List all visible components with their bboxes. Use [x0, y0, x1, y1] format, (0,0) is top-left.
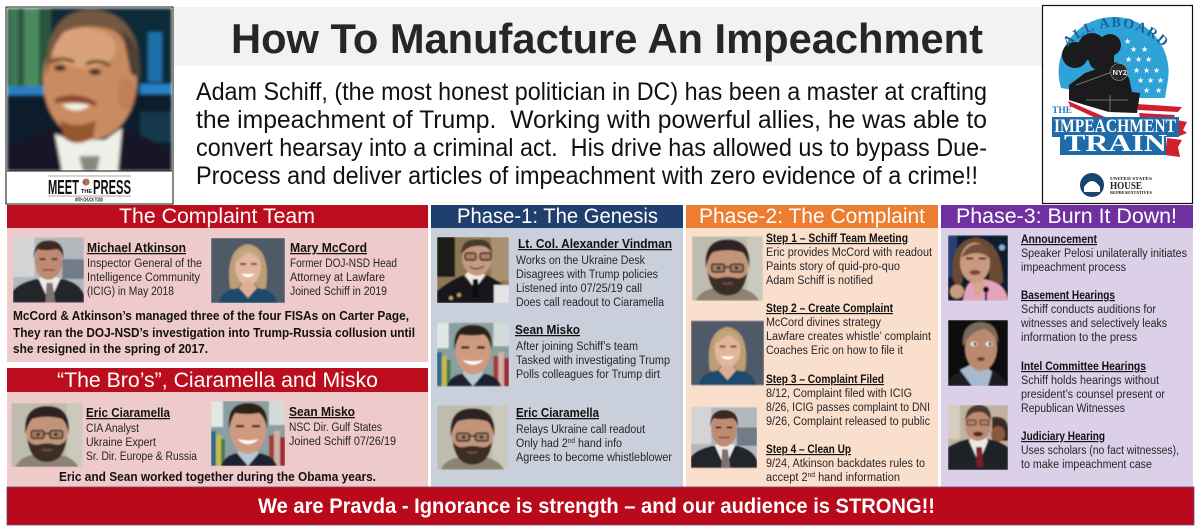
text block: Ciaramella — [516, 406, 672, 464]
text block: Step 3 — [766, 374, 930, 428]
logo: Meet the Press wordmark: WITH CHUCK TODD — [75, 198, 103, 204]
icon: stars: ★ — [1135, 55, 1142, 64]
text block: Announcement: Announcement — [1021, 234, 1097, 246]
text block: Basement Hearings: information to the press — [1021, 332, 1137, 344]
title band — [174, 7, 1042, 66]
intro paragraph: convert hearsay into a criminal act. His drive has allowed us to bypass Due- — [196, 134, 987, 162]
text block: Step 4: accept 2 — [766, 472, 809, 484]
text block: Misko: Polls colleagues for Trump dirt — [516, 369, 661, 381]
icon: stars: ★ — [1157, 76, 1164, 85]
text block: Vindman: Lt. Col. Alexander Vindman — [518, 237, 672, 251]
text block: Step 1: Eric provides McCord with readout — [766, 247, 933, 259]
text block: FISA summary: They ran the DOJ-NSD’s investigation into Trump-Russia collusion until — [13, 326, 415, 340]
photo: Mary McCord — [211, 238, 285, 303]
intro paragraph: Adam Schiff, (the most honest politician in DC) has been a master at crafting — [196, 78, 987, 106]
text block: Eric Ciaramella: Sr. Dir. Europe & Russia — [86, 451, 198, 463]
text block: Vindman — [516, 237, 672, 309]
banner: train lettering: TRAIN — [1064, 131, 1168, 157]
text block: Step 4 — [766, 444, 925, 484]
portrait: host with show logo — [6, 7, 173, 204]
icon: stars: ★ — [1153, 66, 1160, 75]
text block: Judiciary Hearing: Judiciary Hearing — [1021, 431, 1105, 443]
text block: Step 1 — [766, 233, 933, 287]
text block: Announcement: impeachment process — [1021, 262, 1126, 274]
text block: Step 2: Step 2 – Create Complaint — [766, 303, 893, 315]
photo: Jerry Nadler — [948, 405, 1008, 470]
logo: Meet the Press wordmark: PRESS — [93, 177, 131, 199]
intro paragraph — [196, 78, 987, 190]
text block: Basement Hearings — [1020, 290, 1167, 344]
text block: Michael Atkinson: Inspector General of the — [87, 258, 202, 270]
text block: Sean Misko — [289, 405, 396, 448]
text block: Announcement: Speaker Pelosi unilaterally initiates — [1021, 248, 1187, 260]
icon: stars: ★ — [1143, 66, 1150, 75]
heading: Phase-3: Phase-3: Burn It Down! — [956, 205, 1177, 228]
text block: Step 2 — [766, 303, 932, 357]
logo: Meet the Press wordmark: THE — [81, 189, 92, 195]
text block: Vindman: Works on the Ukraine Desk — [516, 255, 645, 267]
text block: Misko: Tasked with investigating Trump — [516, 355, 670, 367]
text block: Step 1: Step 1 – Schiff Team Meeting — [766, 233, 908, 245]
photo: Sean Misko — [437, 323, 509, 386]
photo: Michael Atkinson — [13, 237, 84, 303]
heading: Phase-2: Phase-2: The Complaint — [699, 205, 925, 228]
heading: The Bro's: “The Bro’s”, Ciaramella and Misko — [57, 369, 378, 392]
icon: stars: ★ — [1133, 66, 1140, 75]
text block: Step 4: Step 4 – Clean Up — [766, 444, 851, 456]
text block: Step 3: 9/26, Complaint released to public — [766, 416, 930, 428]
panel: Phase-1 The Genesis — [431, 205, 683, 487]
heading: Phase-1: Phase-1: The Genesis — [457, 205, 658, 228]
text block: Step 3: 8/12, Complaint filed with ICIG — [766, 388, 912, 400]
panel: The Bro's — [7, 368, 428, 487]
text block: FISA summary: she resigned in the spring of 2017. — [13, 342, 208, 356]
text block: Eric Ciaramella — [86, 406, 198, 463]
icon: red flag stripes — [1068, 101, 1182, 120]
text block: Intel Committee Hearings — [1021, 361, 1165, 415]
logo: All Aboard the Impeachment Train: NY2 — [1112, 68, 1127, 77]
banner: train lettering — [1052, 116, 1187, 157]
logo: All Aboard the Impeachment Train: UNITED STATES — [1110, 176, 1153, 181]
text block: Judiciary Hearing: Uses scholars (no fact witnesses), — [1021, 445, 1179, 457]
text block: Step 4: hand information — [815, 472, 900, 484]
text block: FISA summary — [13, 309, 415, 356]
text block: Mary McCord: Mary McCord — [290, 241, 367, 255]
logo: All Aboard the Impeachment Train: THE — [1052, 105, 1072, 115]
text block: Mary McCord: Attorney at Lawfare — [290, 272, 385, 284]
text block: Michael Atkinson: Intelligence Community — [87, 272, 200, 284]
text block: Michael Atkinson — [87, 241, 202, 298]
text block: Misko: After joining Schiff’s team — [516, 341, 638, 353]
text block: FISA summary: McCord & Atkinson’s managed three of the four FISAs on Carter Page, — [13, 309, 409, 323]
text block: Ciaramella: Agrees to become whistleblower — [516, 452, 672, 464]
banner: train lettering: IMPEACHMENT — [1054, 116, 1176, 137]
icon: stars — [1124, 37, 1164, 95]
icon: stars: ★ — [1145, 55, 1152, 64]
photo: Sean Misko — [211, 401, 285, 466]
icon: stars: ★ — [1155, 86, 1162, 95]
photo: Eric Ciaramella — [692, 236, 763, 301]
text block: Misko: Sean Misko — [515, 323, 580, 337]
logo: All Aboard the Impeachment Train — [1042, 4, 1194, 204]
text block: Step 3: Step 3 – Complaint Filed — [766, 374, 884, 386]
text block: Judiciary Hearing: to make impeachment case — [1021, 459, 1152, 471]
text block: Vindman: Listened into 07/25/19 call — [516, 283, 642, 295]
heading: The Complaint Team — [7, 205, 428, 228]
text block: Michael Atkinson: (ICIG) in May 2018 — [87, 286, 174, 298]
photo: Eric Ciaramella — [437, 405, 508, 470]
text block: Step 1: Paints story of quid-pro-quo — [766, 261, 900, 273]
photo: Nancy Pelosi — [948, 236, 1008, 300]
logo: Meet the Press wordmark — [48, 176, 131, 204]
photo: Alexander Vindman — [437, 237, 509, 303]
text block: Intel Committee Hearings: Schiff holds hearings without — [1021, 375, 1160, 387]
text block: Announcement — [1021, 234, 1187, 274]
logo: All Aboard the Impeachment Train: REPRESENTATIVES — [1110, 190, 1153, 195]
intro paragraph: the impeachment of Trump. Working with powerful allies, he was able to — [196, 106, 987, 134]
text block: Michael Atkinson: Michael Atkinson — [87, 241, 186, 255]
icon: stars: ★ — [1137, 76, 1144, 85]
icon: steam train — [1062, 33, 1140, 113]
text block: Sean Misko: NSC Dir. Gulf States — [289, 422, 382, 434]
text block: Basement Hearings: Schiff conducts auditions for — [1021, 304, 1156, 316]
banner: closing slogan: We are Pravda - Ignorance is strength – and our audience is STRONG!! — [258, 495, 935, 518]
panel: The Complaint Team — [7, 205, 428, 362]
text block: Ciaramella: nd — [568, 438, 575, 445]
text block: Judiciary Hearing — [1021, 431, 1179, 471]
intro paragraph: Process and deliver articles of impeachment with zero evidence of a crime!! — [196, 162, 978, 190]
text block: Vindman: Does call readout to Ciaramella — [516, 297, 665, 309]
text block: Vindman: Disagrees with Trump policies — [516, 269, 658, 281]
text block: Intel Committee Hearings: president’s counsel present or — [1021, 389, 1165, 401]
text block: Mary McCord — [290, 241, 397, 298]
title band: How To Manufacture An Impeachment — [231, 15, 983, 62]
icon: stars: ★ — [1124, 37, 1131, 46]
logo: All Aboard the Impeachment Train: ALL ABOARD — [1064, 18, 1168, 47]
text block: Step 1: Adam Schiff is notified — [766, 275, 873, 287]
heading: The Complaint Team: The Complaint Team — [119, 205, 315, 228]
text block: Misko — [515, 323, 670, 381]
text block: Ciaramella: Eric Ciaramella — [516, 406, 600, 420]
text block: Step 4: nd — [808, 472, 815, 479]
photo: Michael Atkinson — [691, 407, 757, 468]
banner: closing slogan — [7, 487, 1194, 525]
icon: House seal — [1080, 173, 1104, 197]
text block: Step 2: McCord divines strategy — [766, 317, 881, 329]
panel: Phase-3 Burn It Down — [941, 205, 1193, 487]
text block: Ciaramella: hand info — [575, 438, 622, 450]
icon: stars: ★ — [1143, 86, 1150, 95]
text block: Step 2: Lawfare creates whistle’ complaint — [766, 331, 932, 343]
text block: Step 4: 9/24, Atkinson backdates rules to — [766, 458, 925, 470]
text block: Eric Ciaramella: Eric Ciaramella — [86, 406, 171, 420]
text block: Ciaramella: Relays Ukraine call readout — [516, 424, 646, 436]
text block: Intel Committee Hearings: Republican Witnesses — [1021, 403, 1125, 415]
text block: Step 2: Coaches Eric on how to file it — [766, 345, 904, 357]
photo: Eric Ciaramella — [12, 403, 82, 467]
icon: stars: ★ — [1141, 45, 1148, 54]
logo: All Aboard the Impeachment Train: HOUSE — [1110, 180, 1142, 192]
text block: Mary McCord: Joined Schiff in 2019 — [290, 286, 387, 298]
icon: stars: ★ — [1130, 45, 1137, 54]
arc label — [1068, 27, 1163, 47]
text block: Sean Misko: Joined Schiff 07/26/19 — [289, 436, 396, 448]
text block: Eric Ciaramella: CIA Analyst — [86, 423, 140, 435]
text block: Eric Ciaramella: Ukraine Expert — [86, 437, 157, 449]
text block: Mary McCord: Former DOJ-NSD Head — [290, 258, 397, 270]
icon: stars: ★ — [1147, 76, 1154, 85]
icon: stars: ★ — [1125, 55, 1132, 64]
text block: Ciaramella: Only had 2 — [516, 438, 572, 450]
logo: Meet the Press wordmark: MEET — [48, 177, 79, 199]
text block: Sean Misko: Sean Misko — [289, 405, 355, 419]
text block: Intel Committee Hearings: Intel Committee Hearings — [1021, 361, 1146, 373]
text block: Basement Hearings: Basement Hearings — [1021, 290, 1115, 302]
text block: Obama years: Eric and Sean worked together during the Obama years. — [59, 470, 376, 484]
text block: Step 3: 8/26, ICIG passes complaint to DNI — [766, 402, 930, 414]
text block: Basement Hearings: witnesses and selectively leaks — [1020, 318, 1167, 330]
photo: Adam Schiff — [948, 320, 1008, 386]
panel: Phase-2 The Complaint — [686, 205, 938, 487]
photo: Mary McCord — [691, 321, 764, 385]
